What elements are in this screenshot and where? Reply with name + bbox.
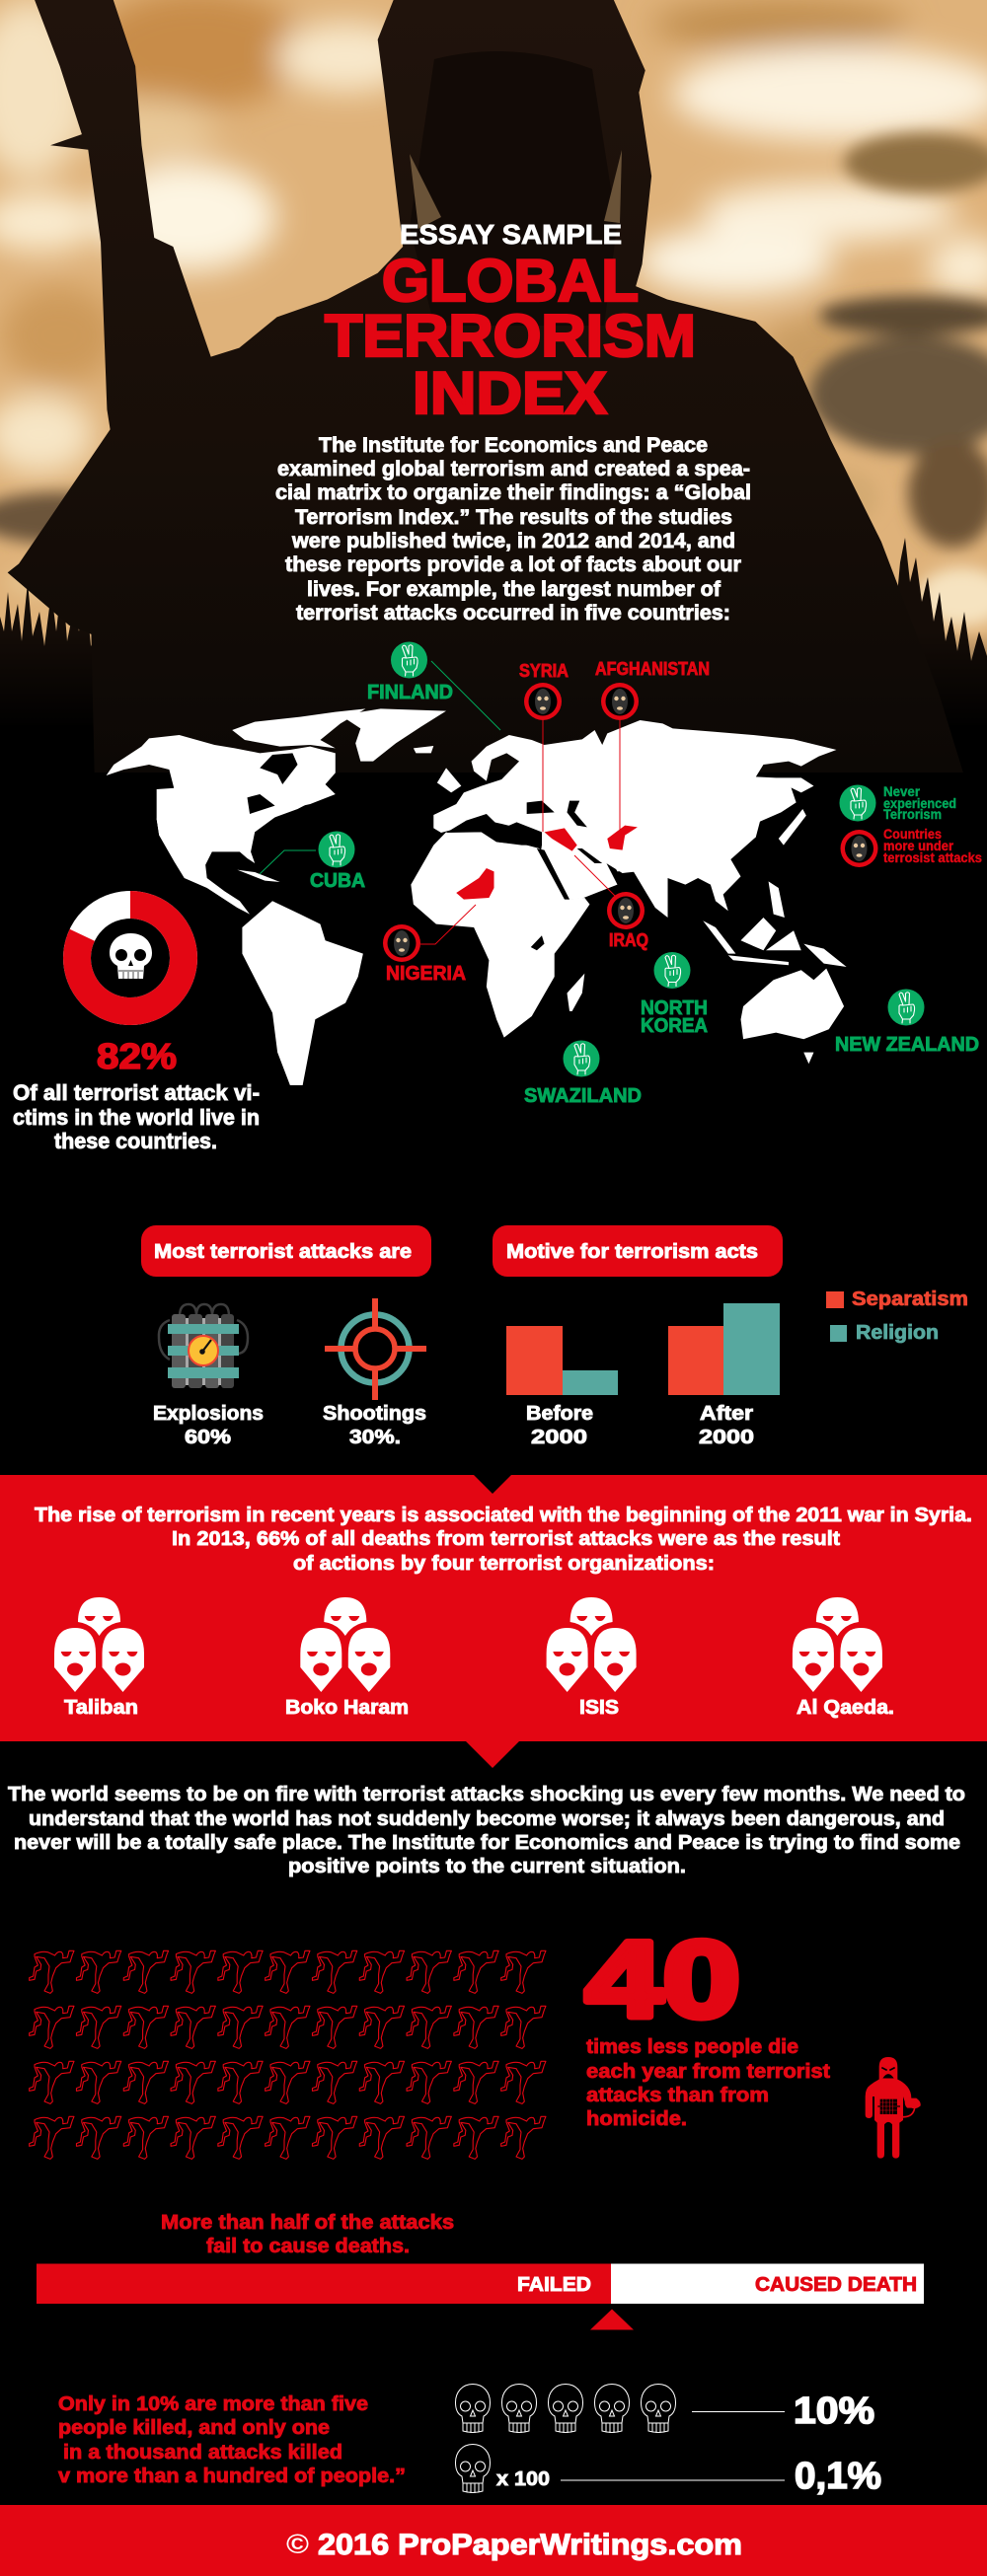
- text: 40 times less: each year from terrorist: [586, 2061, 830, 2083]
- title line: GLOBAL: GLOBAL: [382, 248, 639, 314]
- icon: suicide bomber figure: [866, 2057, 921, 2159]
- panel: motives heading: Motive for terrorism acts: [506, 1241, 758, 1263]
- country: Iraq: [607, 892, 648, 950]
- text: only in 10%: [58, 2393, 406, 2487]
- map: Australia: [741, 969, 844, 1039]
- country: Swaziland: [524, 1040, 642, 1107]
- text: only in 10%: v more than a hundred of people.”: [58, 2466, 406, 2487]
- scarf opening highlights: [410, 150, 622, 229]
- icon: pointer triangle: [590, 2309, 634, 2330]
- country: North Korea: KOREA: [641, 1015, 708, 1037]
- map: Madagascar: [567, 974, 584, 1011]
- text: more than half of attacks: More than half of the attacks: [161, 2212, 454, 2234]
- country: Swaziland: SWAZILAND: [524, 1085, 642, 1107]
- country: Cuba: CUBA: [310, 870, 365, 892]
- icon: Taliban masks: [54, 1597, 144, 1692]
- text: 40 times less: homicide.: [586, 2108, 687, 2130]
- row: skull x100 0,1%: x 100: [496, 2468, 550, 2490]
- world map: [107, 708, 847, 1085]
- row: five skulls 10%: 10%: [794, 2391, 874, 2432]
- face opening: [410, 51, 617, 326]
- heading block: [325, 219, 696, 426]
- label: explosions: [153, 1403, 264, 1448]
- footer: ©: [286, 2529, 309, 2559]
- donut chart 82%: [77, 905, 184, 1011]
- 82% caption: ctims in the world live in: [13, 1105, 260, 1130]
- map legend: Terrorism: [883, 807, 942, 822]
- 82% caption: Of all terrorist attack vi-: [13, 1080, 260, 1105]
- intro paragraph: terrorist attacks occurred in five countries:: [296, 602, 730, 625]
- country: Finland: FINLAND: [367, 682, 453, 703]
- text: more than half of attacks: fail to cause deaths.: [206, 2236, 410, 2257]
- intro paragraph: The Institute for Economics and Peace: [319, 434, 708, 457]
- label: shootings: 30%.: [349, 1427, 401, 1448]
- intro paragraph: lives. For example, the largest number of: [307, 578, 721, 601]
- footer: 2016 ProPaperWritings.com: [318, 2529, 742, 2561]
- text: only in 10%: Only in 10% are more than five: [58, 2393, 368, 2415]
- label: shootings: Shootings: [323, 1403, 426, 1425]
- 82% figure: 82%: [97, 1036, 177, 1076]
- stacked bar: failed vs caused death: [37, 2263, 924, 2304]
- map: highlighted Afghanistan: [607, 826, 638, 850]
- row: skull x100 0,1%: [456, 2445, 881, 2497]
- title line: TERRORISM: TERRORISM: [325, 303, 696, 369]
- label: explosions: Explosions: [153, 1403, 264, 1425]
- band text: The rise of terrorism in recent years is associated with the beginning of the 2011 war in Syria.: [35, 1505, 972, 1526]
- title line: INDEX: INDEX: [413, 360, 607, 426]
- text: only in 10%: people killed, and only one: [58, 2417, 330, 2439]
- label: after 2000: After: [700, 1403, 753, 1425]
- label: after 2000: [699, 1403, 754, 1448]
- intro paragraph: examined global terrorism and created a spea-: [277, 458, 750, 480]
- chart legend: [826, 1288, 968, 1344]
- intro paragraph: these reports provide a lot of facts about our: [285, 553, 741, 576]
- label: Al Qaeda: Al Qaeda.: [797, 1697, 894, 1719]
- map: Europe and northern Asia: [433, 720, 836, 861]
- paragraph: world on fire: understand that the world has not suddenly become worse; it always been dangerous, and: [29, 1808, 945, 1830]
- map legend: more under: [883, 839, 954, 853]
- map legend: [839, 784, 982, 867]
- paragraph: world on fire: The world seems to be on fire with terrorist attacks shocking us every few months. We need to: [8, 1784, 965, 1805]
- connector lines: [260, 661, 620, 944]
- map: South and Southeast Asia: [602, 836, 748, 918]
- country: Syria: SYRIA: [519, 661, 569, 681]
- silhouette of armed figure: [8, 0, 963, 773]
- band text: In 2013, 66% of all deaths from terrorist attacks were as the result: [172, 1528, 840, 1550]
- intro paragraph: cial matrix to organize their findings: a “Global: [275, 481, 751, 504]
- country: New Zealand: [835, 989, 979, 1056]
- label: after 2000: 2000: [699, 1427, 754, 1448]
- map: Africa: [411, 832, 589, 1038]
- map: highlighted Syria and Iraq: [545, 828, 577, 851]
- country: Afghanistan: [595, 659, 710, 720]
- stacked bar: failed vs caused death: FAILED: [517, 2274, 591, 2296]
- map: inland seas: [248, 753, 602, 950]
- row: five skulls 10%: [456, 2384, 874, 2433]
- panel: motives heading: [493, 1225, 783, 1277]
- map: Britain: [437, 768, 461, 792]
- subtitle: ESSAY SAMPLE: [400, 219, 622, 250]
- text: 40 times less: attacks than from: [586, 2085, 769, 2106]
- label: ISIS: ISIS: [579, 1697, 619, 1719]
- text: only in 10%: in a thousand attacks killed: [63, 2442, 342, 2464]
- map legend: Never: [883, 784, 921, 799]
- chart legend: Separatism: [852, 1288, 968, 1310]
- bar chart: motives: [506, 1303, 780, 1448]
- map legend: experienced: [883, 796, 956, 811]
- stacked bar: failed vs caused death: CAUSED DEATH: [755, 2274, 917, 2296]
- label: Taliban: Taliban: [64, 1697, 138, 1719]
- icon: ISIS masks: [547, 1597, 637, 1692]
- country: Afghanistan: AFGHANISTAN: [595, 659, 710, 679]
- map: Alaska and Canada: [107, 735, 336, 836]
- country: Syria: [519, 661, 569, 720]
- map: Caribbean: [237, 870, 280, 882]
- map: Tasmania: [803, 1053, 813, 1064]
- map legend: Countries: [883, 827, 942, 842]
- paragraph: world on fire: [8, 1784, 965, 1877]
- intro paragraph: were published twice, in 2012 and 2014, and: [291, 530, 735, 552]
- row: skull x100 0,1%: 0,1%: [795, 2456, 881, 2497]
- panel: red band on terrorist organizations: [0, 1475, 987, 1768]
- label: before 2000: 2000: [531, 1427, 587, 1448]
- map: United States and Mexico: [157, 782, 310, 915]
- map: Iceland: [414, 746, 433, 753]
- label: Boko Haram: Boko Haram: [285, 1697, 409, 1719]
- 82% caption: these countries.: [54, 1129, 217, 1153]
- pictogram: outlined people grid: [30, 1950, 546, 2159]
- label: explosions: 60%: [185, 1427, 231, 1448]
- map: South America: [242, 901, 363, 1085]
- chart legend: Religion: [856, 1322, 939, 1344]
- panel: attack types heading: [141, 1225, 431, 1277]
- map: Southeast Asia islands: [703, 809, 847, 967]
- map: China and central Asia block: [582, 789, 769, 873]
- country: Finland: [367, 641, 453, 703]
- label: before 2000: [526, 1403, 593, 1448]
- country: Nigeria: [383, 924, 466, 985]
- country: Nigeria: NIGERIA: [386, 963, 466, 985]
- header photo: sky and silhouette: [0, 0, 987, 779]
- country: North Korea: [641, 952, 708, 1037]
- text: more than half of attacks: [161, 2212, 454, 2257]
- panel: attack types heading: Most terrorist attacks are: [154, 1241, 412, 1263]
- country: Cuba: [310, 831, 365, 892]
- paragraph: world on fire: never will be a totally safe place. The Institute for Economics and Peace is trying to find some: [14, 1832, 960, 1854]
- map: highlighted Niger: [456, 868, 494, 900]
- trees: [0, 538, 987, 770]
- intro paragraph: Terrorism Index.” The results of the studies: [295, 506, 732, 529]
- 82% caption: [13, 1080, 260, 1153]
- icon: crosshair target: [325, 1298, 426, 1400]
- map legend: terrosist attacks: [883, 850, 982, 865]
- icon: dynamite bomb: [159, 1304, 248, 1388]
- icon: Boko Haram masks: [300, 1597, 390, 1692]
- footer: [0, 2505, 987, 2576]
- country: New Zealand: NEW ZEALAND: [835, 1034, 979, 1056]
- band text: of actions by four terrorist organizations:: [293, 1553, 715, 1575]
- band text: [35, 1505, 972, 1575]
- label: shootings: [323, 1403, 426, 1448]
- icon: skull: [110, 933, 152, 979]
- big number 40: 40: [585, 1919, 740, 2040]
- icon: Al Qaeda masks: [793, 1597, 882, 1692]
- country: Iraq: IRAQ: [609, 930, 648, 950]
- map: Arctic islands: [232, 708, 365, 748]
- map: Greenland: [341, 708, 446, 762]
- text: 40 times less: times less people die: [586, 2036, 798, 2058]
- text: 40 times less: [586, 2036, 830, 2130]
- map: Arabia: [541, 846, 618, 900]
- intro paragraph: [275, 434, 751, 625]
- country: North Korea: NORTH: [641, 997, 708, 1019]
- paragraph: world on fire: positive points to the current situation.: [288, 1856, 686, 1877]
- label: before 2000: Before: [526, 1403, 593, 1425]
